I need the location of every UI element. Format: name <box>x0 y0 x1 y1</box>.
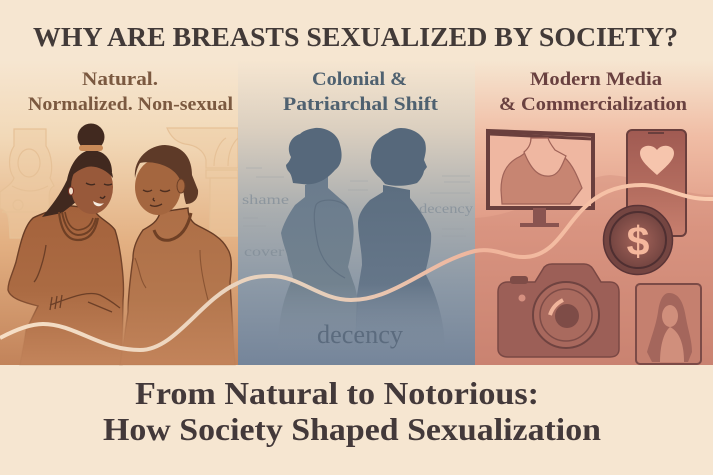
icon: camera <box>498 264 619 357</box>
silhouette: right woman <box>355 128 445 350</box>
arm lines <box>135 250 208 300</box>
heading: colonial <box>283 69 439 115</box>
faded words: cover <box>244 245 284 260</box>
heading: colonial: Patriarchal Shift <box>283 94 439 115</box>
hair <box>135 145 198 204</box>
figure: left woman <box>8 124 123 365</box>
faded words <box>242 193 473 260</box>
braids <box>42 150 112 217</box>
features <box>86 183 112 198</box>
icon: phone <box>627 130 686 236</box>
faded words: decency <box>419 202 473 217</box>
subtitle <box>103 375 601 447</box>
face <box>71 160 113 214</box>
earring <box>68 187 74 195</box>
silhouette: left woman <box>278 128 358 350</box>
heading: natural <box>28 69 233 115</box>
wave: timeline <box>0 185 713 350</box>
faded text lines <box>243 168 470 236</box>
panel: colonial <box>238 60 475 365</box>
heading: natural: Natural. <box>82 69 158 90</box>
heading: modern <box>499 69 687 115</box>
figure: right woman <box>120 145 235 365</box>
heading: modern: Modern Media <box>530 69 663 90</box>
icon: monitor <box>488 131 593 227</box>
features <box>143 190 170 206</box>
icon: dollar coin <box>604 206 672 274</box>
faded words: shame <box>242 193 289 208</box>
icon: photo frame <box>636 284 701 364</box>
panel: natural <box>0 60 238 365</box>
word: decency: decency <box>317 320 403 349</box>
heading: natural: Normalized. Non-sexual <box>28 94 233 115</box>
heading: colonial: Colonial & <box>312 69 407 90</box>
subtitle: From Natural to Notorious: <box>135 375 539 411</box>
hair bun <box>78 124 104 150</box>
hair band <box>79 145 103 151</box>
background hill <box>475 175 713 365</box>
heading: modern: & Commercialization <box>499 94 687 115</box>
arm lines <box>34 245 120 312</box>
panel: modern media <box>475 60 713 365</box>
icon: dollar coin: $ <box>627 218 650 264</box>
necklace <box>59 212 98 240</box>
temple statue background <box>0 128 238 238</box>
face <box>135 159 181 215</box>
necklace <box>154 213 191 240</box>
subtitle: How Society Shaped Sexualization <box>103 411 601 447</box>
title: WHY ARE BREASTS SEXUALIZED BY SOCIETY? <box>33 22 678 52</box>
